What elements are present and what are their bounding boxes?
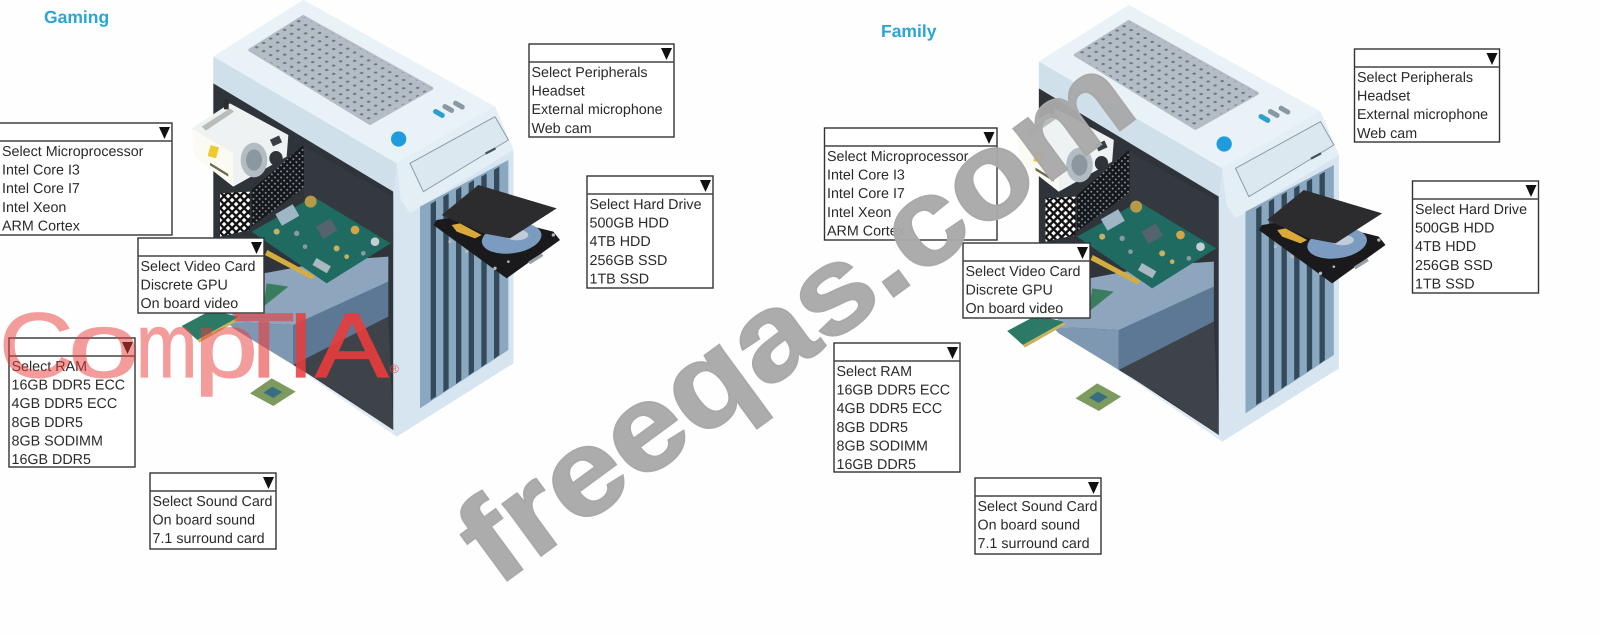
dropdown: video card	[138, 238, 264, 313]
dropdown: microprocessor	[0, 123, 172, 235]
panel: family	[824, 5, 1538, 554]
dropdown: microprocessor: Intel Xeon	[2, 200, 66, 216]
heading: Gaming: Gaming	[44, 7, 109, 27]
dropdown: sound card	[975, 478, 1101, 554]
dropdown: hard drive: 4TB HDD	[1415, 239, 1476, 255]
dropdown: hard drive: 4TB HDD	[590, 234, 651, 250]
dropdown: microprocessor: ARM Cortex	[2, 218, 80, 234]
dropdown: video card: Select Video Card	[140, 259, 256, 275]
dropdown: video card: Discrete GPU	[966, 283, 1053, 299]
dropdown: hard drive: 500GB HDD	[590, 216, 669, 232]
dropdown: RAM: 8GB SODIMM	[836, 438, 928, 454]
logo: CompTIA watermark: ®	[390, 362, 399, 376]
dropdown: sound card: Select Sound Card	[978, 499, 1098, 515]
dropdown: microprocessor: Intel Core I3	[827, 168, 905, 184]
dropdown: RAM: 16GB DDR5	[12, 452, 91, 468]
logo: CompTIA watermark: m	[136, 295, 197, 397]
dropdown: peripherals: Web cam	[532, 121, 592, 137]
dropdown: microprocessor: Intel Xeon	[827, 205, 891, 221]
dropdown: microprocessor: ARM Cortex	[827, 223, 905, 239]
logo: CompTIA watermark	[0, 295, 399, 397]
logo: CompTIA watermark: C	[0, 295, 73, 397]
illustration: gaming PC tower	[182, 0, 560, 437]
dropdown: hard drive	[587, 176, 713, 288]
logo: CompTIA watermark: o	[68, 295, 140, 397]
dropdown: microprocessor	[824, 128, 997, 240]
dropdown: sound card: On board sound	[978, 518, 1080, 534]
dropdown: hard drive: 1TB SSD	[1415, 276, 1475, 292]
dropdown: microprocessor: Intel Core I7	[827, 186, 905, 202]
dropdown: sound card: Select Sound Card	[152, 494, 273, 510]
dropdown: peripherals: Web cam	[1357, 126, 1417, 142]
dropdown: hard drive: 1TB SSD	[590, 271, 649, 287]
dropdown: hard drive: 256GB SSD	[1415, 258, 1493, 274]
dropdown: hard drive	[1412, 181, 1538, 293]
dropdown: peripherals: Headset	[1357, 89, 1410, 105]
dropdown: hard drive: Select Hard Drive	[1415, 202, 1527, 218]
dropdown: peripherals: Select Peripherals	[1357, 70, 1473, 86]
dropdown: hard drive: Select Hard Drive	[590, 197, 702, 213]
illustration: family PC tower	[1007, 5, 1385, 442]
dropdown: RAM	[834, 343, 960, 473]
dropdown: microprocessor: Select Microprocessor	[2, 144, 144, 160]
dropdown: sound card: 7.1 surround card	[978, 536, 1090, 552]
dropdown: peripherals	[529, 44, 674, 137]
dropdown: RAM: 8GB SODIMM	[12, 433, 103, 449]
dropdown: microprocessor: Intel Core I3	[2, 163, 80, 179]
dropdown: sound card: On board sound	[152, 513, 255, 529]
dropdown: microprocessor: Select Microprocessor	[827, 149, 969, 165]
dropdown: sound card: 7.1 surround card	[152, 531, 265, 547]
watermark: freeqas.com: freeqas.com	[432, 26, 1157, 609]
dropdown: video card	[963, 243, 1090, 318]
dropdown: RAM: 8GB DDR5	[12, 415, 83, 431]
dropdown: video card: Select Video Card	[966, 264, 1081, 280]
dropdown: RAM: 16GB DDR5	[836, 457, 916, 473]
dropdown: video card: On board video	[140, 296, 238, 312]
logo: CompTIA watermark: T	[233, 295, 295, 397]
dropdown: RAM	[9, 338, 135, 468]
dropdown: microprocessor: Intel Core I7	[2, 181, 80, 197]
logo: CompTIA watermark: A	[315, 295, 389, 397]
dropdown: video card: Discrete GPU	[140, 278, 228, 294]
dropdown: peripherals	[1354, 49, 1500, 142]
dropdown: hard drive: 500GB HDD	[1415, 221, 1494, 237]
dropdown: video card: On board video	[966, 301, 1063, 317]
dropdown: RAM: Select RAM	[12, 359, 87, 375]
dropdown: peripherals: Headset	[532, 84, 585, 100]
heading: Family: Family	[881, 21, 937, 41]
dropdown: peripherals: External microphone	[532, 102, 663, 118]
dropdown: hard drive: 256GB SSD	[590, 253, 667, 269]
dropdown: peripherals: Select Peripherals	[532, 65, 648, 81]
dropdown: RAM: 16GB DDR5 ECC	[12, 378, 125, 394]
logo: CompTIA watermark: p	[194, 295, 258, 397]
panel: gaming	[0, 0, 713, 549]
dropdown: sound card	[150, 473, 276, 549]
logo: CompTIA watermark: I	[288, 295, 314, 397]
dropdown: RAM: 4GB DDR5 ECC	[836, 401, 942, 417]
dropdown: RAM: Select RAM	[836, 364, 912, 380]
dropdown: RAM: 8GB DDR5	[836, 420, 908, 436]
dropdown: RAM: 16GB DDR5 ECC	[836, 383, 950, 399]
dropdown: RAM: 4GB DDR5 ECC	[12, 396, 117, 412]
dropdown: peripherals: External microphone	[1357, 107, 1488, 123]
